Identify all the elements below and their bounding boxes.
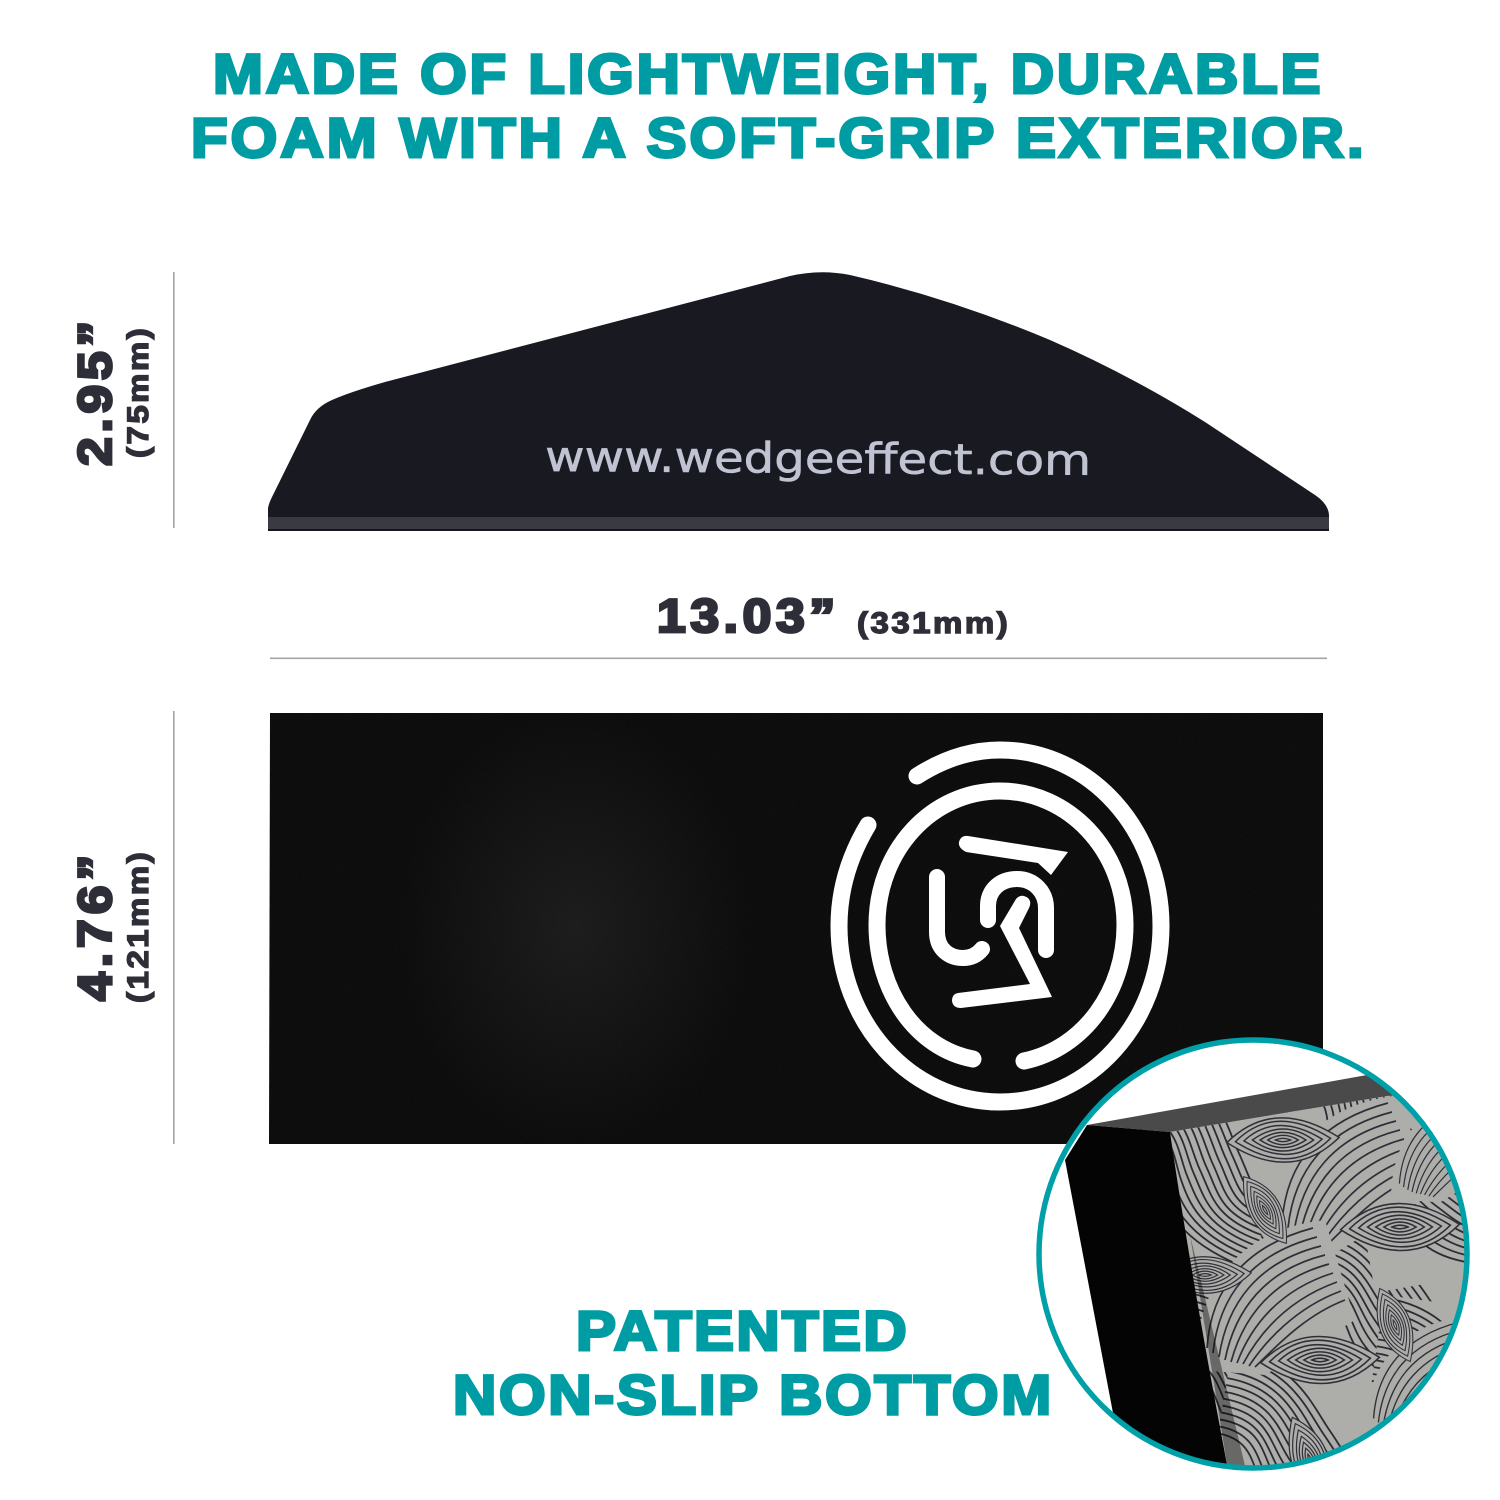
foam top edge — [1087, 1075, 1392, 1132]
title: FOAM WITH A SOFT-GRIP EXTERIOR. — [191, 108, 1364, 170]
foam textured face — [1170, 1096, 1464, 1466]
website text: www.wedgeeffect.com — [545, 432, 1091, 485]
dimension: width 4.76 inches: 4.76” — [69, 855, 121, 1001]
dimension: width 4.76 inches: (121mm) — [120, 852, 155, 1003]
title: MADE OF LIGHTWEIGHT, DURABLE — [213, 44, 1320, 106]
dimension: height 2.95 inches: (75mm) — [120, 328, 155, 458]
caption: patented non-slip bottom: PATENTED — [576, 1301, 907, 1363]
title — [191, 44, 1364, 170]
wedge side view — [268, 272, 1329, 531]
dimension: height 2.95 inches: 2.95” — [69, 321, 121, 466]
dimension: width 4.76 inches — [69, 711, 175, 1144]
dimension: height 2.95 inches — [69, 272, 175, 528]
dimension: length 13.03 inches: (331mm) — [857, 605, 1008, 640]
shadow on textured face — [1190, 1235, 1246, 1470]
inset: non-slip bottom detail — [1036, 1037, 1470, 1471]
dimension: length 13.03 inches — [270, 590, 1327, 659]
caption: patented non-slip bottom: NON-SLIP BOTTOM — [453, 1365, 1051, 1427]
logo — [839, 750, 1161, 1102]
wedge top view — [269, 713, 1323, 1144]
foam black side — [1065, 1125, 1228, 1470]
dimension: length 13.03 inches: 13.03” — [657, 590, 835, 642]
caption: patented non-slip bottom — [453, 1301, 1051, 1427]
